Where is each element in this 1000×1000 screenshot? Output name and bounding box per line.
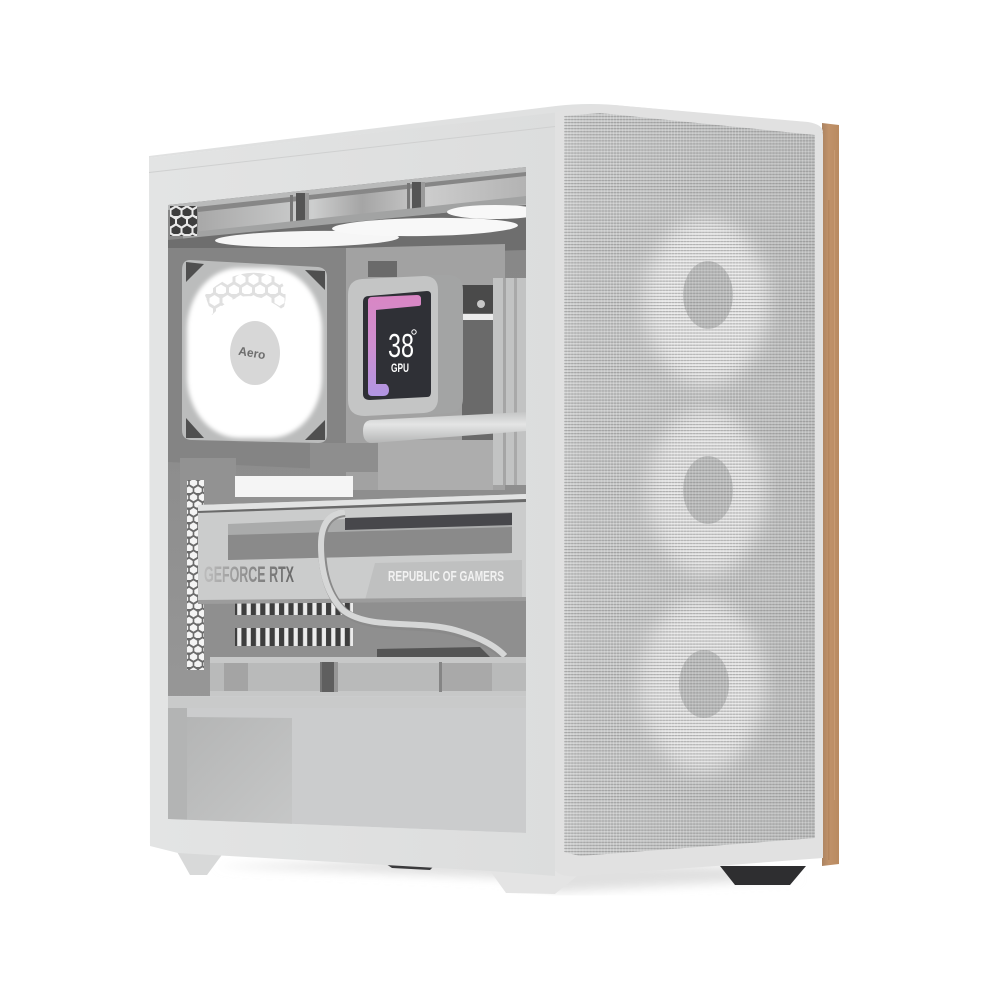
floor shadow (215, 860, 800, 892)
rear fan (182, 260, 327, 443)
pump label: GPU (391, 361, 409, 375)
top fan glow 3 (447, 205, 526, 219)
pump screen (363, 291, 431, 400)
tray top shadow (168, 205, 526, 250)
top fan housing band (168, 167, 526, 241)
I/O bracket plate (180, 458, 236, 465)
expansion slot 2 (235, 628, 353, 646)
side frame (149, 112, 555, 876)
motherboard shelf (310, 443, 378, 472)
PCI cover white (235, 476, 353, 497)
fan hex pattern (205, 273, 286, 315)
fan hub (230, 321, 280, 385)
top fan glow 2 (332, 218, 518, 236)
motherboard tray upper (346, 244, 505, 490)
hex vent column (187, 480, 204, 670)
product illustration: PC case (149, 104, 839, 894)
expansion slot 1 (235, 603, 353, 615)
RAM modules (493, 278, 526, 485)
foot: front-left (176, 850, 224, 875)
VRM area dark (462, 285, 493, 440)
AIO tube (363, 412, 526, 443)
top crease line (149, 126, 555, 173)
fan logo: Aero (237, 344, 267, 362)
mesh texture (560, 110, 820, 860)
wood rear panel (822, 123, 839, 866)
pump screen arc (368, 295, 421, 396)
fan white blades (187, 268, 322, 438)
front fan 2 (648, 408, 764, 576)
GPU series text: REPUBLIC OF GAMERS (388, 568, 504, 585)
window interior (168, 165, 543, 833)
socket lower block (378, 440, 493, 490)
AIO pump (348, 275, 463, 416)
GPU (198, 494, 526, 604)
bottom fan band (210, 657, 526, 697)
front fan 3 (640, 597, 764, 773)
top panel (149, 104, 823, 158)
M.2 card (377, 647, 490, 657)
cable (321, 512, 505, 657)
front fan 1 (644, 218, 768, 386)
foot: rear dark (720, 866, 806, 885)
lower chamber (204, 600, 526, 660)
GPU lower edge (198, 597, 526, 604)
pump temperature: 38 (388, 327, 414, 364)
top fan glow 1 (215, 230, 399, 248)
icon: rear hex vent (170, 206, 197, 236)
upper chamber background (168, 165, 526, 705)
PSU shroud (168, 696, 526, 833)
degree mark (412, 330, 416, 334)
vent grille (368, 261, 397, 277)
front mesh panel (555, 105, 823, 876)
foot: centre (488, 868, 582, 894)
rear chamber shade (168, 248, 346, 470)
foot: small dark (380, 860, 436, 870)
GPU brand text: GEFORCE RTX (204, 562, 294, 587)
